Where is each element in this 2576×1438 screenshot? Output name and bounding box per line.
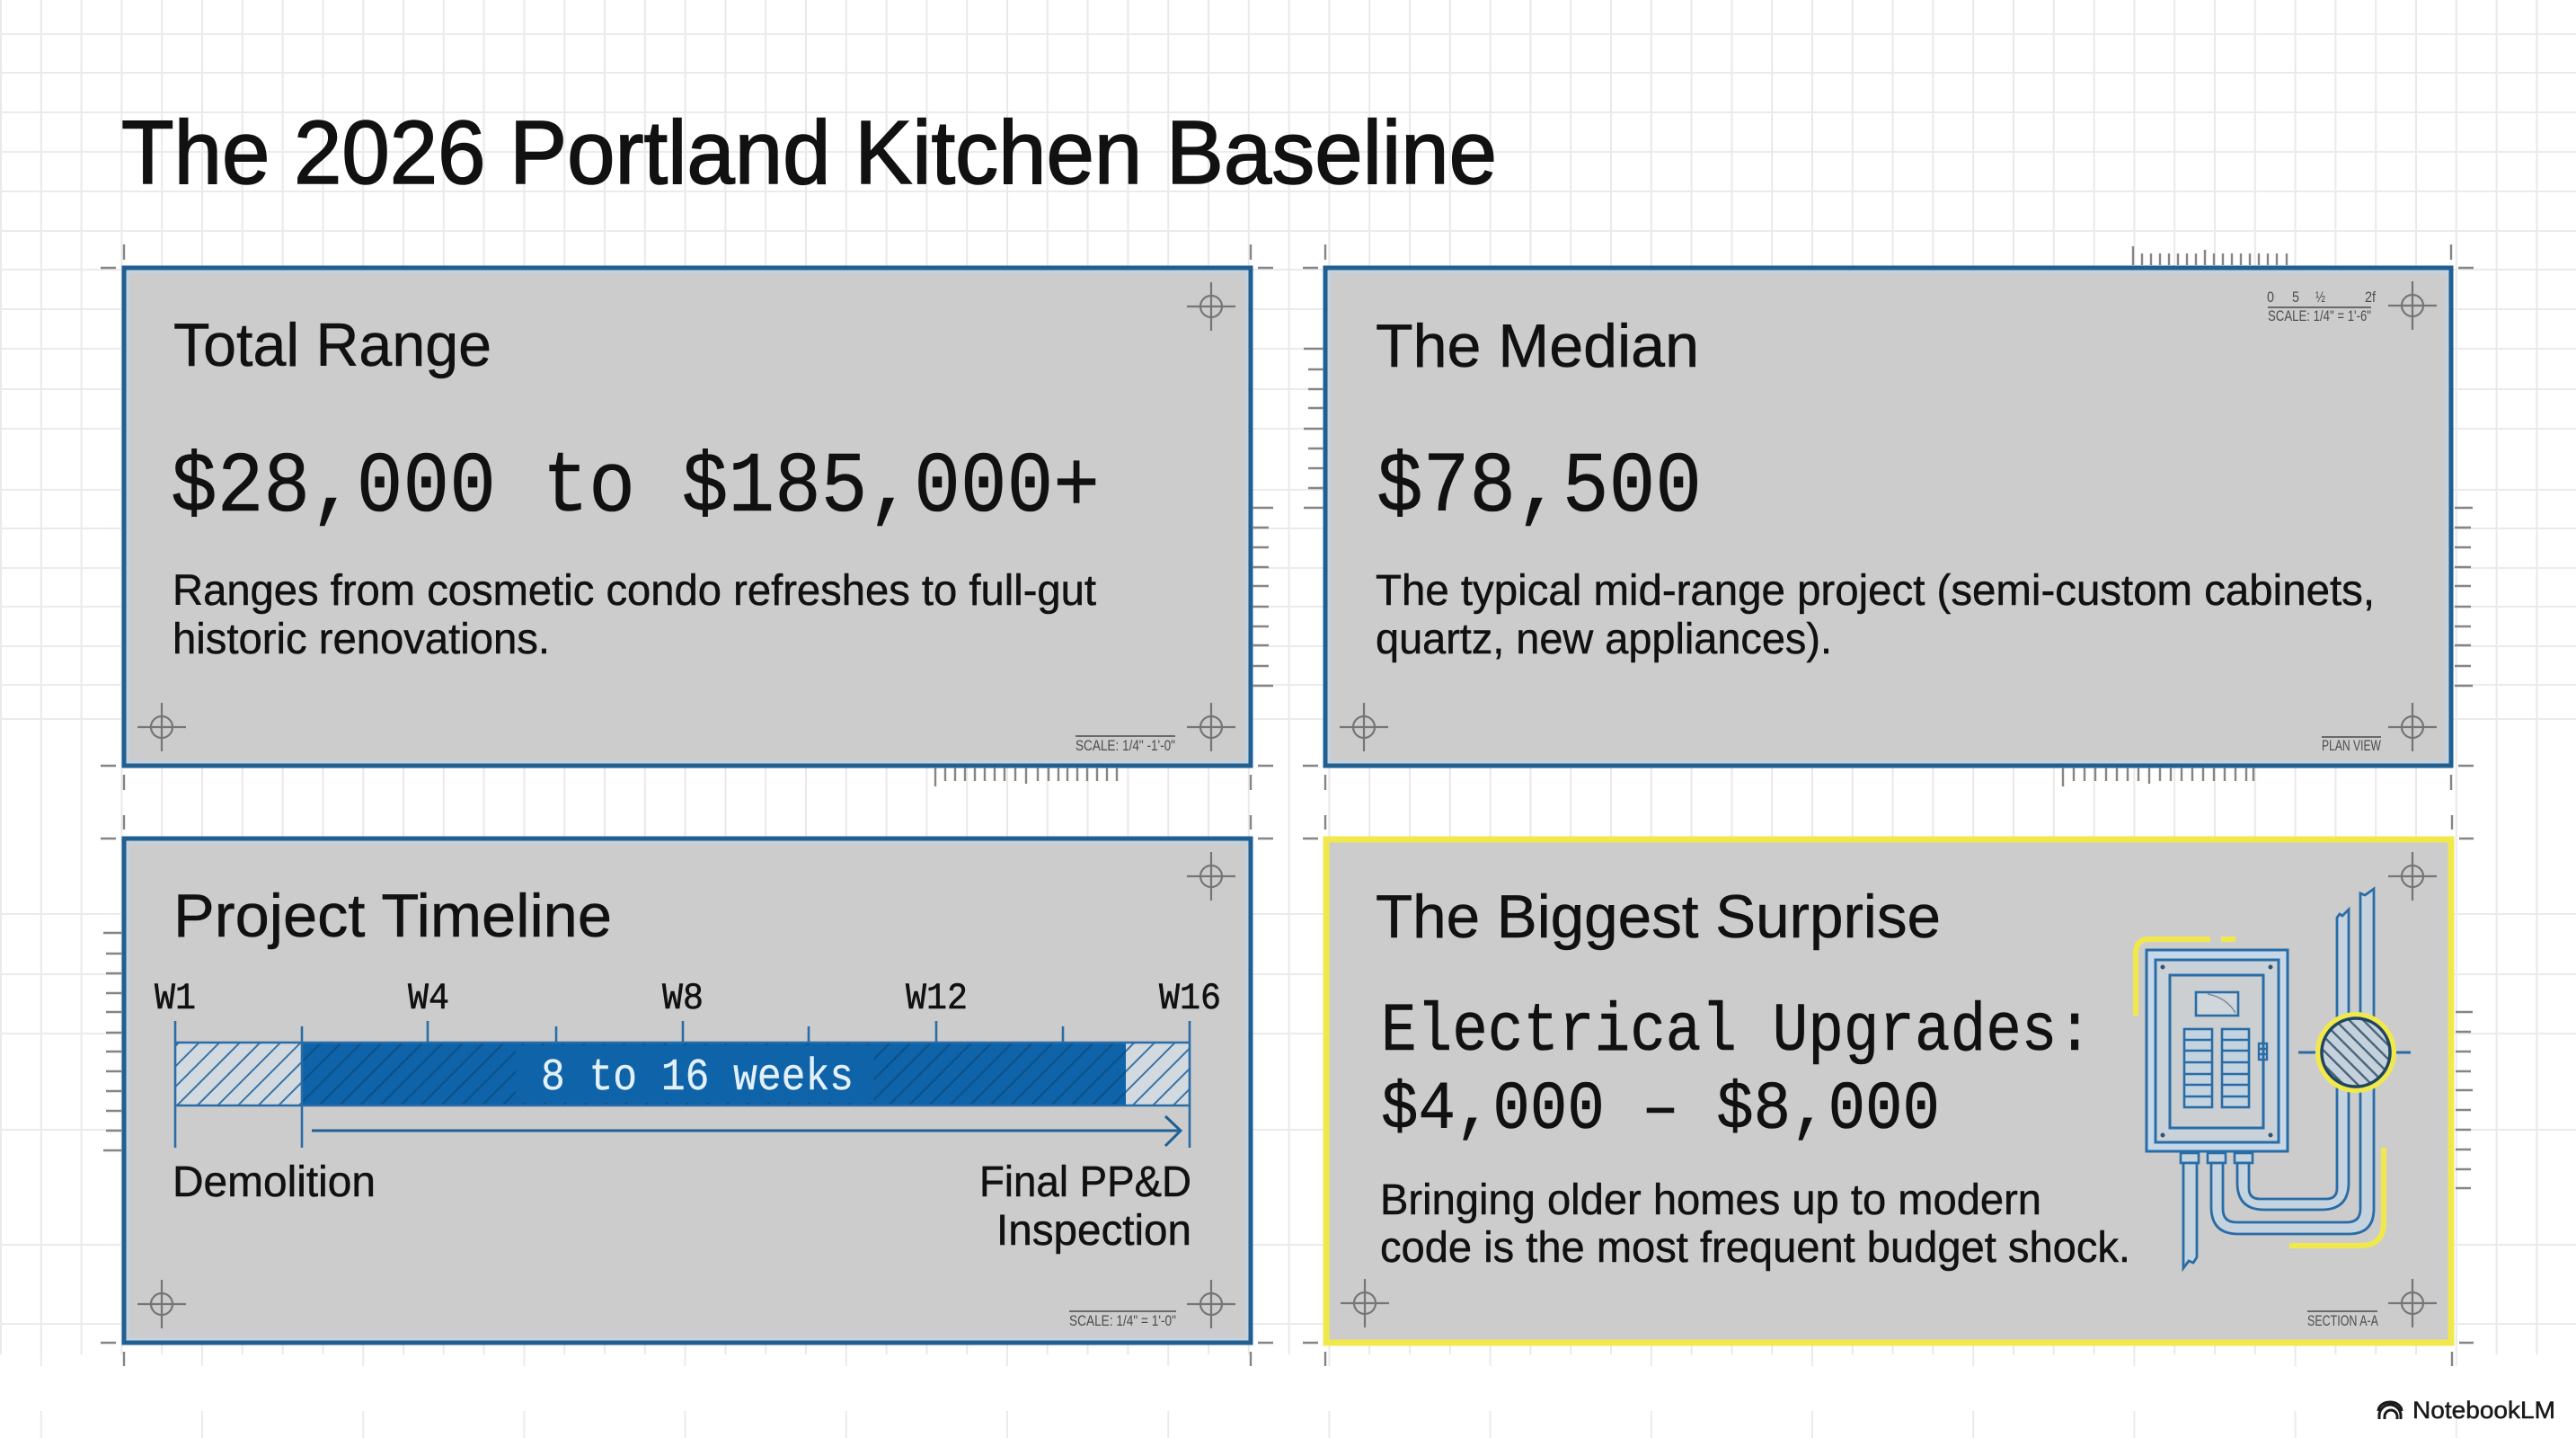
conduit runs bbox=[2183, 889, 2374, 1268]
registration marks: panel 4 bbox=[1303, 815, 2474, 1366]
scale bar label: panel 2 top: ½ bbox=[2315, 288, 2325, 306]
ruler ticks: panel 2 top bbox=[2133, 246, 2287, 265]
heading: project timeline: Project Timeline bbox=[173, 882, 612, 950]
ruler ticks: panel 2 left bbox=[1304, 349, 1323, 508]
crosshair circles: panel 1 bbox=[151, 296, 1222, 738]
ruler ticks: panel 3 left bbox=[103, 933, 122, 1150]
panel: project timeline bbox=[124, 839, 1251, 1343]
week labels: W12 bbox=[906, 977, 968, 1020]
value: median cost: $78,500 bbox=[1377, 439, 1702, 537]
arrow: duration bbox=[312, 1116, 1181, 1146]
description: biggest surprise: Bringing older homes up to modern bbox=[1380, 1176, 2041, 1224]
crosshair marks bbox=[1341, 852, 2437, 1327]
icon: electrical panel and conduit bbox=[2136, 889, 2411, 1268]
crosshair circles: panel 3 bbox=[151, 865, 1222, 1315]
breaker box bbox=[2147, 950, 2288, 1151]
description: the median: The typical mid-range project (semi-custom cabinets, bbox=[1376, 567, 2375, 615]
week labels: W16 bbox=[1159, 977, 1221, 1020]
description: the median bbox=[1376, 567, 2375, 663]
crosshair marks bbox=[1340, 281, 2437, 751]
scale label: panel 1: SCALE: 1/4" -1'-0" bbox=[1076, 737, 1175, 754]
label: demolition: Demolition bbox=[173, 1158, 376, 1206]
timeline bar bbox=[175, 1021, 1190, 1148]
crosshair marks bbox=[137, 852, 1235, 1328]
week labels bbox=[155, 977, 1221, 1020]
bar label: 8 to 16 weeks bbox=[541, 1052, 854, 1104]
value: electrical upgrades: $4,000 – $8,000 bbox=[1381, 1071, 1940, 1149]
description: total range bbox=[173, 567, 1096, 663]
scale bar label: panel 2 top: 5 bbox=[2292, 288, 2299, 306]
description: the median: quartz, new appliances). bbox=[1376, 616, 1832, 663]
logo: NotebookLM: NotebookLM bbox=[2412, 1397, 2555, 1424]
description: total range: historic renovations. bbox=[173, 616, 550, 663]
panel: total range bbox=[124, 268, 1251, 766]
description: biggest surprise: code is the most frequent budget shock. bbox=[1380, 1224, 2130, 1272]
label: final inspection: Inspection bbox=[996, 1207, 1191, 1255]
ruler ticks: panel 2 right bbox=[2455, 508, 2473, 686]
value: cost range: $28,000 to $185,000+ bbox=[171, 439, 1100, 537]
heading: the biggest surprise: The Biggest Surprise bbox=[1376, 883, 1941, 951]
ruler ticks: panel 4 right bbox=[2456, 1012, 2473, 1188]
week labels: W1 bbox=[155, 977, 196, 1020]
description: total range: Ranges from cosmetic condo refreshes to full-gut bbox=[173, 567, 1096, 615]
scale bar label: panel 2 top: SCALE: 1/4" = 1'-6" bbox=[2268, 307, 2371, 324]
heading: total range: Total Range bbox=[173, 311, 491, 379]
panel: the biggest surprise bbox=[1326, 839, 2451, 1343]
scale label: panel 3: SCALE: 1/4" = 1'-0" bbox=[1069, 1312, 1176, 1329]
registration marks: panel 2 bbox=[1303, 244, 2474, 790]
scale bar label: panel 2 top: 0 bbox=[2267, 288, 2274, 306]
registration marks: panel 3 bbox=[101, 815, 1273, 1366]
value: electrical upgrades: Electrical Upgrades: bbox=[1381, 993, 2093, 1070]
ruler ticks: panel 1 right bbox=[1253, 508, 1273, 686]
label: final inspection: Final PP&D bbox=[979, 1158, 1191, 1206]
yellow highlight brackets bbox=[2136, 939, 2384, 1246]
heading: the median: The Median bbox=[1376, 312, 1699, 380]
scale bar label: panel 2 top: 2f bbox=[2365, 288, 2376, 306]
panel: the median bbox=[1325, 268, 2451, 766]
plan view label: PLAN VIEW bbox=[2322, 737, 2381, 754]
crosshair circles: panel 4 bbox=[1354, 865, 2423, 1314]
label: final inspection bbox=[979, 1158, 1191, 1255]
scale bar label: panel 2 top bbox=[2267, 288, 2376, 324]
registration marks: panel 1 bbox=[101, 244, 1273, 790]
ruler ticks: panel 2 bottom bbox=[2063, 768, 2253, 786]
highlighted junction circle bbox=[2298, 1012, 2411, 1093]
crosshair marks bbox=[137, 282, 1235, 751]
week labels: W4 bbox=[408, 977, 449, 1020]
title: The 2026 Portland Kitchen Baseline bbox=[121, 102, 1497, 203]
week labels: W8 bbox=[662, 977, 704, 1020]
description: biggest surprise bbox=[1380, 1176, 2130, 1272]
section label: SECTION A-A bbox=[2307, 1312, 2378, 1329]
ruler ticks: panel 1 bottom bbox=[935, 768, 1117, 786]
conduit connectors bbox=[2181, 1153, 2253, 1163]
value: electrical upgrades bbox=[1381, 993, 2093, 1149]
crosshair circles: panel 2 bbox=[1353, 295, 2423, 738]
icon: notebook arcs bbox=[2378, 1402, 2402, 1419]
